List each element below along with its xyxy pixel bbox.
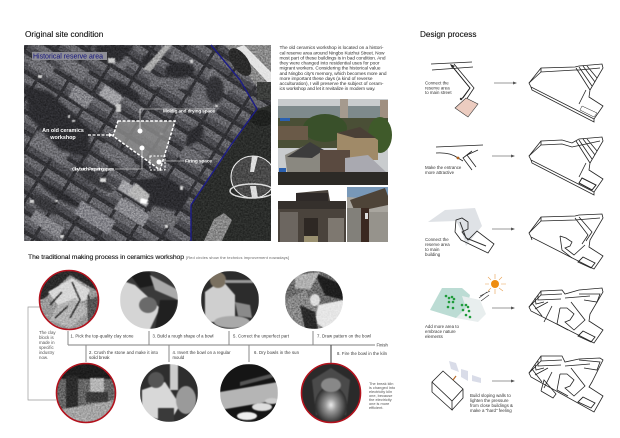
plan 4 bbox=[529, 288, 603, 343]
step 4 diagram: nature elements: Add more area to bbox=[425, 324, 459, 329]
callout: clay batch preparing space bbox=[72, 146, 144, 172]
callout: an old ceramics workshop: workshop bbox=[49, 135, 76, 141]
arrow 2 bbox=[492, 154, 515, 158]
step labels: 2. Crush the stone and make it into bbox=[89, 350, 159, 355]
step labels: 3. Build a rough shape of a bowl bbox=[152, 334, 214, 338]
step 3 diagram: connect to main building bbox=[425, 208, 494, 257]
heading: traditional making process: [Red circles show the technics improvement nowadays] bbox=[186, 255, 289, 260]
note: kiln fuel: efficient. bbox=[369, 405, 383, 410]
arrow 5 bbox=[492, 380, 515, 382]
step 5 diagram: sloping walls: Build sloping walls to bbox=[470, 393, 511, 398]
callout: firing space bbox=[156, 158, 212, 164]
step labels: mould bbox=[172, 355, 185, 360]
bright roofs and roads bbox=[30, 45, 218, 238]
photo circle: drying bowls bbox=[220, 364, 279, 422]
note: kiln fuel bbox=[369, 381, 395, 410]
step 3 diagram: connect to main building: to main bbox=[425, 247, 440, 252]
callout: an old ceramics workshop: An old ceramics bbox=[42, 128, 84, 134]
text block: site description: migrant workers. Considering the historical value bbox=[280, 66, 381, 72]
step labels: 1. Pick the top-quality clay stone bbox=[70, 334, 134, 338]
plan 2 bbox=[529, 137, 603, 195]
photo circle: correcting the bowl bbox=[201, 271, 259, 329]
arrow 1 bbox=[494, 82, 517, 84]
step labels: 5. Correct the unperfect part bbox=[233, 334, 290, 338]
step 2 diagram: attractive entrance bbox=[425, 145, 483, 175]
bracket linking red circles bbox=[28, 307, 56, 400]
workshop highlight area bbox=[113, 121, 175, 170]
text block: site description: and Ningbo city's memory, which becomes more and bbox=[280, 71, 387, 77]
note: clay block bbox=[39, 330, 56, 360]
circular landmark bbox=[230, 156, 275, 198]
photo circle: firing in kiln (red) bbox=[301, 363, 361, 424]
text block: site description: ics workshop and let it revitalize in modern way. bbox=[280, 86, 376, 92]
map grain bbox=[24, 45, 271, 241]
text block: site description: more important these days (a kind of reverse bbox=[280, 76, 373, 82]
step labels bbox=[70, 334, 388, 360]
callout: molding and drying space bbox=[138, 108, 215, 134]
photo circle: shaping a bowl bbox=[120, 271, 178, 329]
dark shadow patches bbox=[24, 45, 224, 218]
step labels: 4. Invert the bowl on a regular bbox=[172, 350, 231, 355]
photo circle: drawing pattern bbox=[285, 271, 343, 329]
photo: neighbourhood overview bbox=[278, 99, 392, 185]
note: kiln fuel: one is more bbox=[369, 401, 389, 406]
building blocks bbox=[28, 43, 234, 238]
step 1 diagram: connect to main street bbox=[425, 62, 478, 117]
step 4 diagram: nature elements: embrace nature bbox=[425, 329, 456, 334]
step 1 diagram: connect to main street: reserve area bbox=[425, 86, 450, 90]
photo circle: inverting the bowl bbox=[140, 364, 198, 422]
heading: traditional making process: The traditional making process in ceramics workshop bbox=[28, 254, 184, 261]
note: clay block: specific bbox=[39, 345, 54, 350]
step labels: solid break bbox=[89, 355, 110, 360]
legend: historical reserve area: Historical reserve area bbox=[33, 54, 103, 60]
aerial site map bbox=[24, 43, 275, 241]
callout: clay batch preparing space: Clay batch Preparing space bbox=[72, 166, 114, 172]
photo: old doorway bbox=[347, 187, 388, 242]
text block: site description bbox=[280, 45, 387, 92]
heading: traditional making process bbox=[28, 254, 289, 261]
step 5 diagram: sloping walls: from close buildings & bbox=[470, 403, 513, 408]
step 3 diagram: connect to main building: Connect the bbox=[425, 237, 449, 242]
step labels: 6. Dry bowls in the sun bbox=[254, 350, 300, 355]
photo: ornate gate building bbox=[278, 189, 346, 242]
text block: site description: acculturation), I will preserve the subject of ceram- bbox=[280, 81, 384, 87]
arrow 4 bbox=[492, 306, 515, 310]
note: kiln fuel: one, because bbox=[369, 393, 392, 398]
process timeline bbox=[68, 331, 375, 363]
text block: site description: they were changed into residential uses for poor bbox=[280, 60, 380, 66]
step labels: 8. Fire the bowl in the kiln bbox=[337, 351, 388, 356]
note: clay block: The clay bbox=[39, 330, 56, 335]
plan 5 bbox=[529, 356, 603, 412]
note: kiln fuel: The break kiln bbox=[369, 381, 393, 386]
step 5 diagram: sloping walls bbox=[432, 361, 513, 413]
note: clay block: block is bbox=[39, 335, 54, 340]
text block: site description: most part of these buildings is in bad condition. And bbox=[280, 56, 386, 62]
step 5 diagram: sloping walls: lighten the pressure bbox=[470, 398, 509, 403]
step 4 diagram: nature elements bbox=[425, 274, 506, 339]
photo circle: crushing stone (red) bbox=[56, 363, 116, 423]
photo circle: clay stone (red) bbox=[39, 270, 99, 330]
plan 1 bbox=[529, 64, 603, 122]
step labels: 7. Draw pattern on the bowl bbox=[317, 334, 371, 338]
step 3 diagram: connect to main building: building bbox=[425, 252, 441, 257]
callout: an old ceramics workshop bbox=[42, 128, 113, 141]
heading: original site condition: Original site condition bbox=[25, 30, 104, 39]
step labels: Finish bbox=[376, 342, 388, 348]
note: kiln fuel: is changed into bbox=[369, 385, 395, 390]
step 1 diagram: connect to main street: to main street bbox=[425, 90, 452, 95]
note: clay block: now. bbox=[39, 355, 48, 360]
step 3 diagram: connect to main building: reserve area bbox=[425, 242, 450, 247]
arrow 3 bbox=[492, 228, 515, 230]
callout: molding and drying space: Moldig and drying space bbox=[163, 108, 215, 114]
text block: site description: cal reserve area around Ningbo Kuizhui Street. Now bbox=[280, 50, 385, 56]
historical reserve boundary line bbox=[191, 45, 257, 241]
step 2 diagram: attractive entrance: Make the entrance bbox=[425, 165, 462, 170]
plan 3 bbox=[529, 214, 603, 269]
note: kiln fuel: electricity kiln bbox=[369, 389, 392, 394]
text block: site description: The old ceramics workshop is located on a histori- bbox=[280, 45, 384, 51]
step 5 diagram: sloping walls: make a "hard" feeling bbox=[470, 408, 512, 413]
heading: design process: Design process bbox=[420, 30, 476, 39]
note: clay block: industry bbox=[39, 350, 55, 355]
note: clay block: made in bbox=[39, 340, 55, 345]
step 2 diagram: attractive entrance: more attractive bbox=[425, 170, 455, 175]
step 1 diagram: connect to main street: Connect the bbox=[425, 80, 449, 86]
roof in forest bbox=[204, 213, 232, 241]
callout: firing space: Firing space bbox=[185, 158, 212, 164]
step 4 diagram: nature elements: elements bbox=[425, 334, 444, 339]
note: kiln fuel: the electricity bbox=[369, 397, 392, 402]
forest area bbox=[191, 105, 271, 241]
